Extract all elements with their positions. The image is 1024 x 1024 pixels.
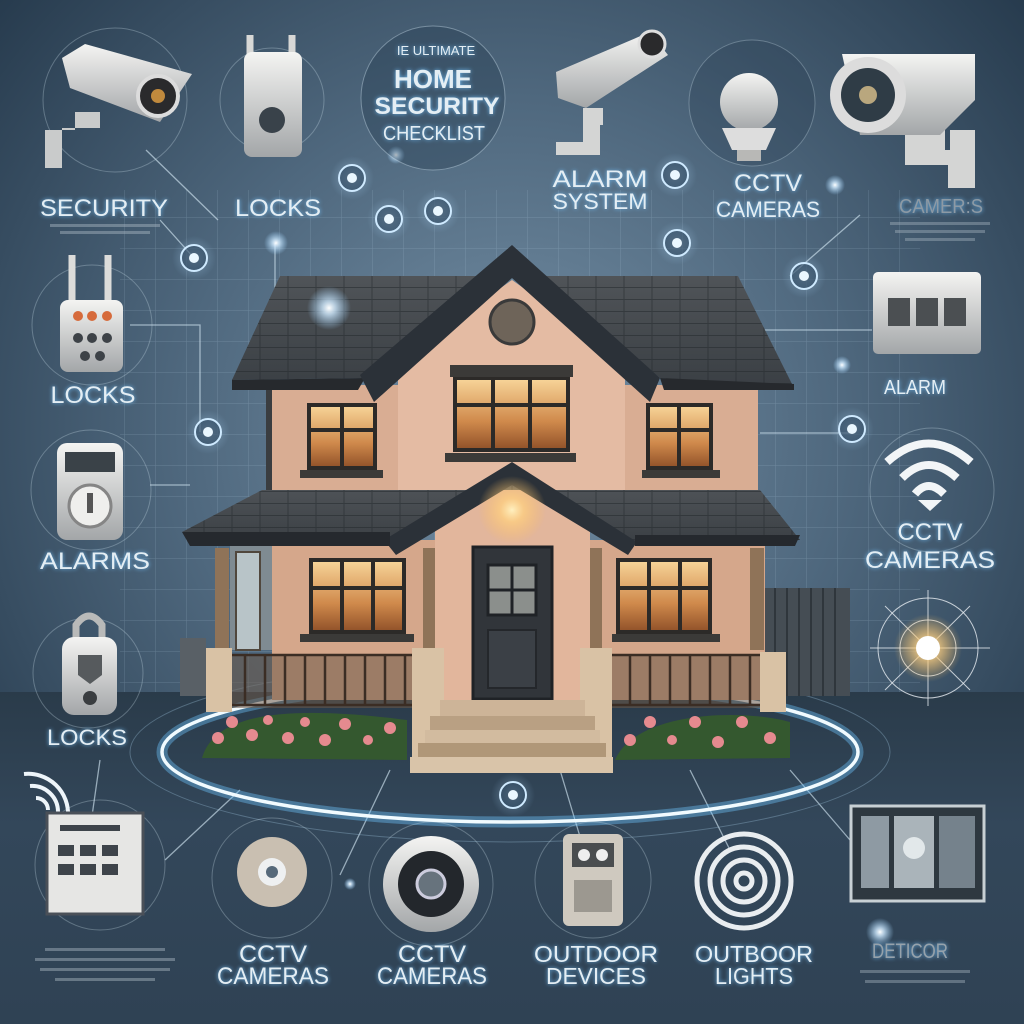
house [180, 245, 850, 773]
icon: wifi [870, 428, 994, 552]
label: cctv cameras 1: CCTV [239, 941, 307, 968]
label: alarm system [552, 166, 648, 214]
icon: round lens camera [369, 822, 493, 946]
lower windows [311, 560, 710, 632]
icon: large camera top right [830, 54, 975, 188]
title: SECURITY [374, 93, 500, 120]
icon: monitor panel [851, 806, 984, 901]
label: alarms: ALARMS [40, 548, 150, 575]
label: alarm system: ALARM [552, 166, 648, 193]
label: cctv cameras top: CCTV [734, 170, 802, 197]
icon: wifi signal left [24, 774, 68, 816]
porch light [478, 476, 546, 544]
label: detector [860, 940, 970, 983]
label: cctv cameras 2 [377, 941, 487, 990]
front door [473, 547, 552, 699]
label: cctv cameras top: CAMERAS [716, 197, 820, 222]
icon: outdoor device [535, 822, 651, 938]
label: locks left: LOCKS [50, 382, 136, 409]
porch columns [215, 548, 764, 650]
icon: keypad left [32, 255, 152, 385]
label: outdoor devices [534, 941, 658, 989]
steps [440, 700, 585, 716]
label: detector: DETICOR [872, 940, 948, 963]
upper windows [309, 378, 711, 468]
label: alarm system: SYSTEM [552, 189, 648, 214]
icon: concentric outdoor light [697, 834, 791, 928]
label: security [40, 195, 168, 234]
label: cctv cameras right: CCTV [898, 519, 962, 546]
main roof [232, 250, 794, 388]
perimeter ring [130, 662, 890, 842]
title: CHECKLIST [383, 123, 485, 145]
label: cctv cameras 1 [217, 941, 329, 990]
icon: smoke sensor [212, 818, 332, 938]
label: faded cameras [890, 196, 990, 241]
label: cctv cameras 2: CCTV [398, 941, 466, 968]
label: locks lower left: LOCKS [47, 725, 127, 750]
lower walls [272, 540, 765, 700]
icon: camera top centre [556, 31, 668, 155]
connector lines [90, 150, 872, 875]
roof light [307, 286, 351, 330]
icon: detector light [870, 590, 990, 706]
porch roof [182, 470, 800, 545]
label: alarm: ALARM [884, 377, 946, 399]
label: cctv cameras top [716, 170, 820, 222]
flower beds [202, 713, 407, 760]
label: cctv cameras right [865, 519, 995, 574]
icon: padlock [33, 616, 143, 728]
title: HOME [394, 64, 472, 94]
side fences [765, 588, 850, 696]
icon: control tablet [35, 800, 165, 930]
label: security: SECURITY [40, 195, 168, 222]
label: outdoor devices: OUTDOOR [534, 941, 658, 967]
label: outdoor lights: LIGHTS [715, 963, 793, 989]
small caption lower left [35, 948, 175, 981]
icon: wall alarm panel [873, 272, 981, 354]
icon: lock device top [220, 35, 324, 157]
icon: alarm dial [31, 430, 151, 550]
label: outdoor lights [695, 941, 813, 989]
label: outdoor lights: OUTBOOR [695, 941, 813, 967]
upper walls [272, 385, 758, 520]
title [361, 26, 505, 170]
icon: dome camera [689, 40, 815, 166]
label: cctv cameras 1: CAMERAS [217, 963, 329, 990]
label: locks top: LOCKS [235, 195, 321, 222]
label: cctv cameras 2: CAMERAS [377, 963, 487, 990]
label: faded cameras: CAMER:S [899, 196, 983, 218]
porch posts [206, 648, 786, 765]
icon: security camera top left [43, 28, 192, 172]
label: cctv cameras right: CAMERAS [865, 547, 995, 574]
status nodes [172, 146, 894, 946]
label: outdoor devices: DEVICES [546, 963, 646, 989]
railings [230, 654, 760, 708]
round attic vent [490, 300, 534, 344]
title: IE ULTIMATE [397, 43, 475, 58]
